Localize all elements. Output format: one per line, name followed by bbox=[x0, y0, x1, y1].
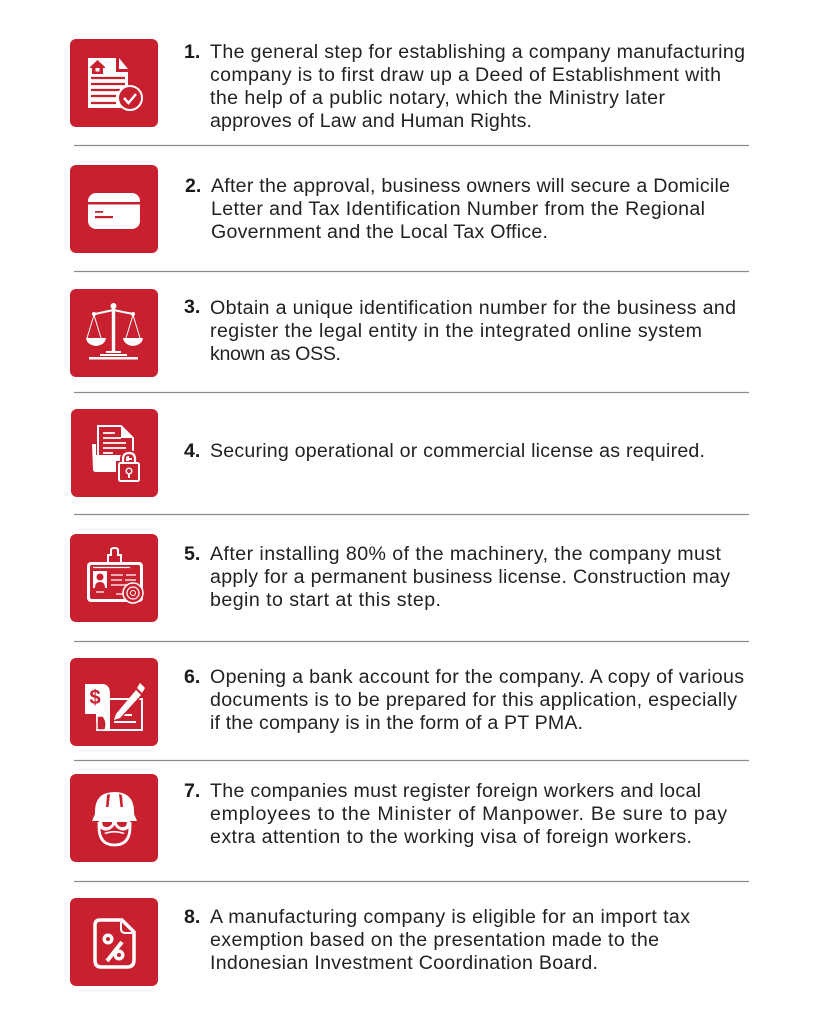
step 6 text: documents is to be prepared for this application, especially bbox=[210, 689, 737, 711]
step 2 text: After the approval, business owners will secure a Domicile bbox=[211, 175, 730, 197]
icon: bank cheque and pen bbox=[70, 658, 158, 746]
step 7 text: The companies must register foreign workers and local bbox=[210, 780, 701, 802]
step 3 text: Obtain a unique identification number for the business and bbox=[210, 297, 736, 319]
step 7 text: extra attention to the working visa of foreign workers. bbox=[210, 826, 692, 848]
step 6 text: if the company is in the form of a PT PMA. bbox=[210, 712, 583, 734]
step 8 text: exemption based on the presentation made to the bbox=[210, 929, 659, 951]
step 6 text: Opening a bank account for the company. A copy of various bbox=[210, 666, 744, 688]
step 8 text bbox=[184, 906, 690, 974]
step 8 text: 8. bbox=[184, 906, 200, 928]
step 1 text: approves of Law and Human Rights. bbox=[210, 110, 532, 132]
step 2 bbox=[70, 165, 730, 253]
step 1 bbox=[70, 39, 745, 132]
step 2 text: Letter and Tax Identification Number from the Regional bbox=[211, 198, 705, 220]
step 5 bbox=[70, 534, 730, 622]
step 3 text: 3. bbox=[184, 296, 200, 318]
step 5 text: apply for a permanent business license. Construction may bbox=[210, 566, 730, 588]
step 3 bbox=[70, 289, 736, 377]
icon: ID badge bbox=[70, 534, 158, 622]
step 1 text: company is to first draw up a Deed of Establishment with bbox=[210, 64, 721, 86]
step 1 text: 1. bbox=[184, 41, 200, 63]
step 5 text: 5. bbox=[184, 543, 200, 565]
step 2 text bbox=[185, 175, 730, 243]
step 1 text: the help of a public notary, which the Ministry later bbox=[210, 87, 665, 109]
step 4 bbox=[71, 409, 705, 497]
icon: scales of justice bbox=[70, 289, 158, 377]
step 7 bbox=[70, 774, 727, 862]
step 7 text bbox=[184, 780, 727, 848]
step 8 text: Indonesian Investment Coordination Board. bbox=[210, 952, 598, 974]
step 3 text: known as OSS. bbox=[210, 343, 341, 365]
step 5 text: begin to start at this step. bbox=[210, 589, 441, 611]
step 5 text: After installing 80% of the machinery, the company must bbox=[210, 543, 722, 565]
step 4 text: 4. bbox=[184, 440, 200, 462]
icon: card bbox=[70, 165, 158, 253]
step 7 text: 7. bbox=[184, 780, 200, 802]
step 5 text bbox=[184, 543, 730, 611]
icon: bank cheque and pen: $ bbox=[89, 687, 101, 709]
step 2 text: 2. bbox=[185, 175, 201, 197]
step 6 text: 6. bbox=[184, 666, 200, 688]
icon: folder with document and padlock bbox=[71, 409, 158, 497]
step 8 text: A manufacturing company is eligible for an import tax bbox=[210, 906, 690, 928]
step 6 text bbox=[184, 666, 744, 734]
step 3 text: register the legal entity in the integrated online system bbox=[210, 320, 702, 342]
step 2 text: Government and the Local Tax Office. bbox=[211, 221, 548, 243]
icon: worker with hard hat bbox=[70, 774, 158, 862]
icon: tax document with percent sign bbox=[70, 898, 158, 986]
step 4 text: Securing operational or commercial license as required. bbox=[210, 440, 705, 462]
icon: document with house and check bbox=[70, 39, 158, 127]
step 6 bbox=[70, 658, 744, 746]
step 1 text: The general step for establishing a company manufacturing bbox=[210, 41, 745, 63]
step 1 text bbox=[184, 41, 745, 132]
step 3 text bbox=[184, 296, 736, 365]
step 8 bbox=[70, 898, 690, 986]
step 7 text: employees to the Minister of Manpower. Be sure to pay bbox=[210, 803, 727, 825]
